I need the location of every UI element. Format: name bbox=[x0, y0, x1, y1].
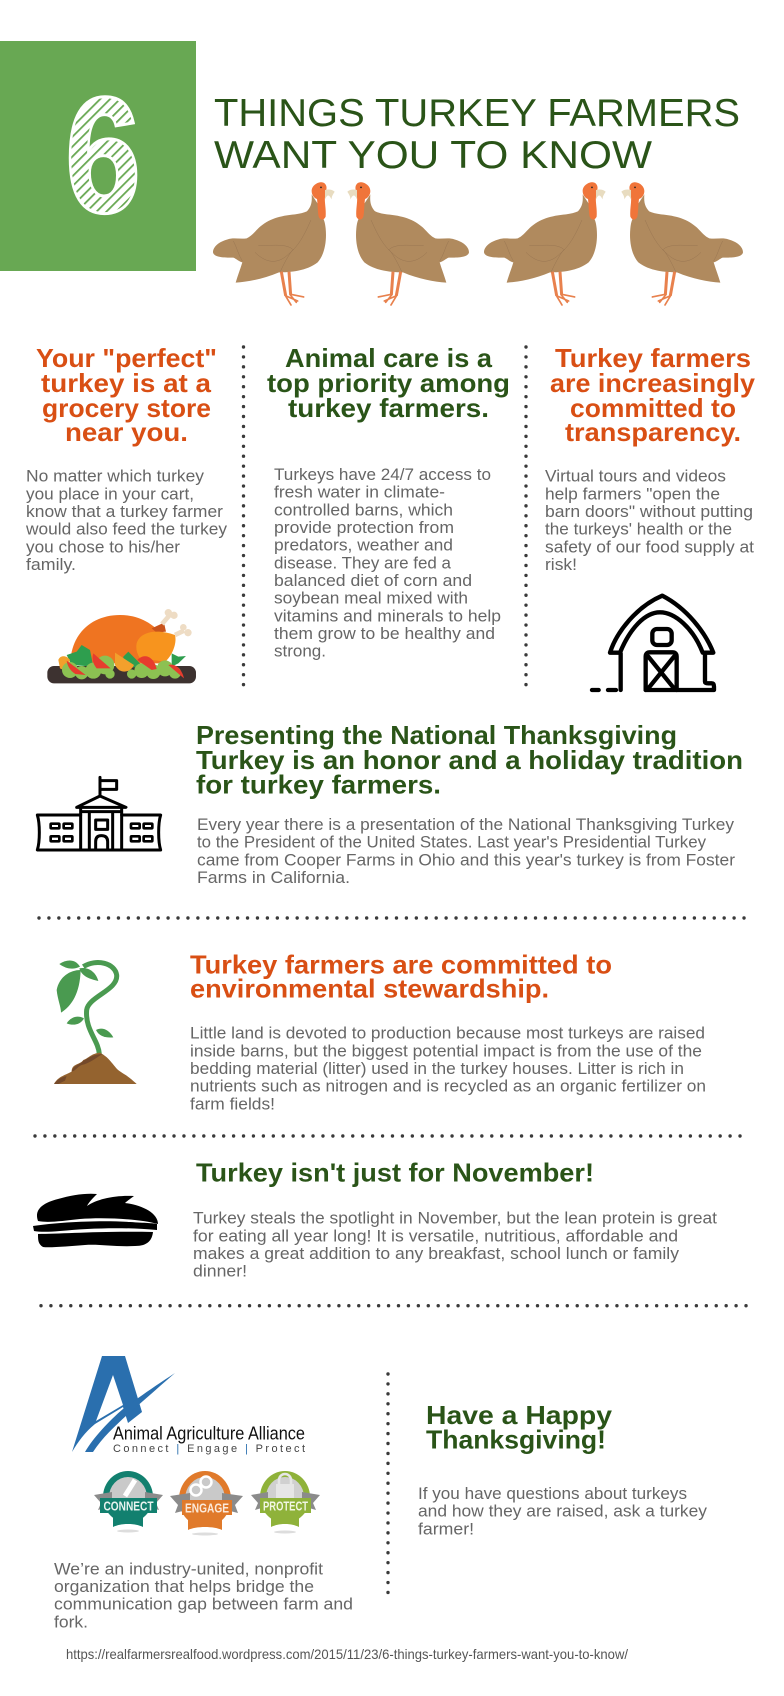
text: transparency body: Virtual tours and videos bbox=[545, 467, 726, 486]
text: national thanksgiving turkey body: came from Cooper Farms in Ohio and this year's turkey is from Foster bbox=[197, 850, 735, 869]
text: animal care body: them grow to be healthy and bbox=[274, 624, 495, 643]
text: animal care body: vitamins and minerals to help bbox=[274, 606, 501, 625]
heading: happy thanksgiving bbox=[426, 1400, 613, 1454]
heading: perfect turkey: Your "perfect" bbox=[36, 343, 217, 373]
text: environmental stewardship body: bedding material (litter) used in the turkey houses. Litter is rich in bbox=[190, 1059, 684, 1078]
badge: engage bbox=[170, 1471, 243, 1536]
text: transparency body: safety of our food supply at bbox=[545, 537, 754, 556]
icon: sprout in soil bbox=[54, 961, 137, 1084]
panel: not just for november bbox=[33, 1158, 717, 1281]
text: perfect turkey body: would also feed the turkey bbox=[25, 520, 228, 539]
heading: happy thanksgiving: Have a Happy bbox=[426, 1400, 613, 1430]
text: animal care body: balanced diet of corn and bbox=[274, 571, 472, 590]
heading: national thanksgiving turkey: Turkey is an honor and a holiday tradition bbox=[196, 745, 743, 775]
heading: not just for november: Turkey isn't just for November! bbox=[196, 1158, 594, 1188]
heading: animal care: turkey farmers. bbox=[288, 393, 489, 423]
heading: animal care: Animal care is a bbox=[285, 343, 493, 373]
source url: https://realfarmersrealfood.wordpress.com/2015/11/23/6-things-turkey-farmers-want-you-to-know/ bbox=[66, 1646, 628, 1662]
logo: animal agriculture alliance bbox=[72, 1356, 305, 1455]
text: perfect turkey body: family. bbox=[26, 555, 76, 574]
logo: animal agriculture alliance: Connect | Engage | Protect bbox=[113, 1443, 305, 1455]
icon: capitol building bbox=[37, 777, 161, 850]
hatched numeral 6: 6 bbox=[65, 63, 141, 247]
text: national thanksgiving turkey body: to the President of the United States. Last year's Presidential Turkey bbox=[197, 833, 706, 852]
text: animal care body: disease. They are fed a bbox=[274, 553, 452, 572]
text: alliance description: fork. bbox=[54, 1612, 88, 1631]
text: not just for november body bbox=[193, 1209, 717, 1281]
text: transparency body: barn doors" without putting bbox=[545, 502, 753, 521]
text: animal care body: Turkeys have 24/7 access to bbox=[274, 465, 491, 484]
text: not just for november body: Turkey steals the spotlight in November, but the lean protein is great bbox=[193, 1209, 717, 1228]
badge: protect: PROTECT bbox=[263, 1498, 308, 1514]
heading: animal care: top priority among bbox=[267, 368, 510, 398]
panel: animal care bbox=[267, 343, 510, 661]
logo: animal agriculture alliance: Animal Agriculture Alliance bbox=[113, 1423, 305, 1443]
heading: environmental stewardship: environmental stewardship. bbox=[190, 973, 549, 1003]
text: animal care body: predators, weather and bbox=[274, 536, 453, 555]
badge: protect bbox=[251, 1471, 320, 1534]
text: transparency body: help farmers "open the bbox=[545, 484, 720, 503]
panel: environmental stewardship bbox=[54, 949, 706, 1113]
heading: environmental stewardship: Turkey farmers are committed to bbox=[190, 949, 612, 979]
heading: happy thanksgiving: Thanksgiving! bbox=[426, 1424, 606, 1454]
text: perfect turkey body: you chose to his/her bbox=[26, 537, 180, 556]
text: alliance description bbox=[54, 1559, 353, 1631]
heading: national thanksgiving turkey: Presenting the National Thanksgiving bbox=[196, 720, 677, 750]
text: national thanksgiving turkey body: Every year there is a presentation of the National Thanksgiving Turkey bbox=[197, 815, 735, 834]
badge: connect bbox=[94, 1471, 163, 1532]
heading: transparency: Turkey farmers bbox=[555, 343, 751, 373]
panel: national thanksgiving turkey bbox=[37, 720, 743, 887]
text: animal care body bbox=[274, 465, 501, 661]
panel: animal agriculture alliance bbox=[54, 1356, 353, 1631]
text: perfect turkey body: you place in your cart, bbox=[26, 484, 194, 503]
heading: animal care bbox=[267, 343, 510, 423]
heading: transparency bbox=[550, 343, 756, 447]
heading: transparency: committed to bbox=[570, 393, 736, 423]
text: not just for november body: for eating all year long! It is versatile, nutritious, affordable and bbox=[193, 1226, 678, 1245]
title: THINGS TURKEY FARMERS bbox=[214, 92, 740, 135]
text: environmental stewardship body: farm fields! bbox=[190, 1094, 275, 1113]
text: animal care body: provide protection from bbox=[274, 518, 454, 537]
text: not just for november body: makes a great addition to any breakfast, school lunch or family bbox=[193, 1244, 680, 1263]
heading: transparency: transparency. bbox=[565, 417, 741, 447]
text: national thanksgiving turkey body bbox=[197, 815, 735, 887]
heading: national thanksgiving turkey: for turkey farmers. bbox=[196, 770, 441, 800]
text: happy thanksgiving body: and how they are raised, ask a turkey bbox=[418, 1502, 708, 1521]
text: transparency body bbox=[545, 467, 754, 574]
heading: national thanksgiving turkey bbox=[196, 720, 743, 800]
text: animal care body: fresh water in climate- bbox=[274, 483, 445, 502]
text: alliance description: We’re an industry-united, nonprofit bbox=[54, 1559, 323, 1578]
text: transparency body: risk! bbox=[545, 555, 577, 574]
icon: four turkeys bbox=[213, 182, 743, 305]
text: animal care body: strong. bbox=[274, 642, 326, 661]
text: happy thanksgiving body: If you have questions about turkeys bbox=[418, 1484, 687, 1503]
panel: transparency bbox=[545, 343, 756, 690]
panel: perfect turkey bbox=[25, 343, 228, 683]
text: environmental stewardship body: Little land is devoted to production because most turkeys are raised bbox=[190, 1024, 705, 1043]
text: animal care body: soybean meal mixed with bbox=[274, 589, 468, 608]
text: perfect turkey body: No matter which turkey bbox=[26, 467, 205, 486]
divider: second column bbox=[524, 347, 528, 686]
text: perfect turkey body: know that a turkey farmer bbox=[26, 502, 223, 521]
text: environmental stewardship body: nutrients such as nitrogen and is recycled as an organic fertilizer on bbox=[190, 1077, 706, 1096]
text: environmental stewardship body bbox=[190, 1024, 706, 1113]
heading: perfect turkey bbox=[36, 343, 217, 447]
icon: sandwich bbox=[33, 1194, 158, 1247]
text: happy thanksgiving body: farmer! bbox=[418, 1519, 474, 1538]
title: WANT YOU TO KNOW bbox=[214, 134, 652, 177]
heading: perfect turkey: turkey is at a bbox=[41, 368, 212, 398]
text: happy thanksgiving body bbox=[418, 1484, 708, 1538]
heading: transparency: are increasingly bbox=[550, 368, 756, 398]
text: not just for november body: dinner! bbox=[193, 1262, 247, 1281]
text: environmental stewardship body: inside barns, but the biggest potential impact is from the use of the bbox=[190, 1041, 702, 1060]
text: alliance description: organization that helps bridge the bbox=[54, 1577, 314, 1596]
text: alliance description: communication gap between farm and bbox=[54, 1595, 353, 1614]
text: animal care body: controlled barns, which bbox=[274, 500, 453, 519]
badge: connect: CONNECT bbox=[104, 1498, 154, 1514]
badge: engage: ENGAGE bbox=[185, 1500, 229, 1516]
header panel: number six bbox=[0, 41, 196, 271]
divider: first column bbox=[242, 347, 245, 686]
heading: environmental stewardship bbox=[190, 949, 612, 1003]
panel: happy thanksgiving bbox=[418, 1400, 708, 1538]
text: national thanksgiving turkey body: Farms in California. bbox=[197, 868, 350, 887]
title bbox=[214, 92, 740, 177]
text: perfect turkey body bbox=[25, 467, 228, 574]
heading: perfect turkey: grocery store bbox=[42, 393, 211, 423]
text: transparency body: the turkeys' health or the bbox=[545, 520, 732, 539]
icon: barn bbox=[592, 596, 714, 690]
heading: perfect turkey: near you. bbox=[65, 417, 188, 447]
icon: roast turkey on platter bbox=[47, 609, 196, 683]
